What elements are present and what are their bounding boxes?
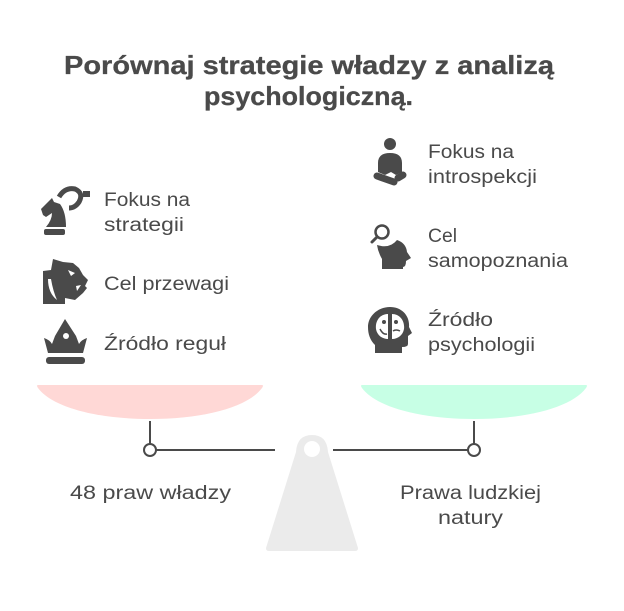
text: Cel przewagi: Cel przewagi	[104, 274, 229, 295]
icon: panther	[43, 259, 88, 304]
text: Źródło reguł: Źródło reguł	[104, 334, 227, 355]
title: psychologiczną.	[204, 81, 413, 111]
label: Prawa ludzkiej natury	[400, 483, 541, 529]
scale base	[266, 435, 358, 551]
text: Fokus na strategii: Fokus na	[104, 190, 190, 211]
text: Źródło psychologii: Źródło	[428, 310, 493, 331]
icon: head with magnifier	[372, 226, 411, 269]
text: Fokus na strategii	[104, 190, 190, 236]
text: Fokus na introspekcji: Fokus na	[428, 142, 514, 163]
text: Cel samopoznania: samopoznania	[428, 251, 568, 272]
icon: head with face	[368, 307, 412, 353]
title	[64, 50, 555, 111]
text: Źródło psychologii	[428, 310, 535, 356]
text: Fokus na introspekcji	[428, 142, 537, 188]
left pan	[37, 385, 263, 419]
right pan	[361, 385, 587, 419]
label: 48 praw władzy: 48 praw władzy	[70, 483, 232, 504]
text: Fokus na strategii: strategii	[104, 215, 184, 236]
icon: meditating person	[377, 138, 403, 182]
text: Cel samopoznania	[428, 226, 568, 272]
text: Źródło psychologii: psychologii	[428, 335, 535, 356]
icon: knight and hook	[41, 189, 90, 235]
label: Prawa ludzkiej natury: natury	[438, 508, 504, 529]
text: Fokus na introspekcji: introspekcji	[428, 167, 537, 188]
label: Prawa ludzkiej natury: Prawa ludzkiej	[400, 483, 541, 504]
icon: crown	[44, 319, 87, 364]
scale beam	[144, 421, 480, 456]
text: Cel samopoznania: Cel	[428, 226, 457, 247]
title: Porównaj strategie władzy z analizą	[64, 50, 555, 80]
